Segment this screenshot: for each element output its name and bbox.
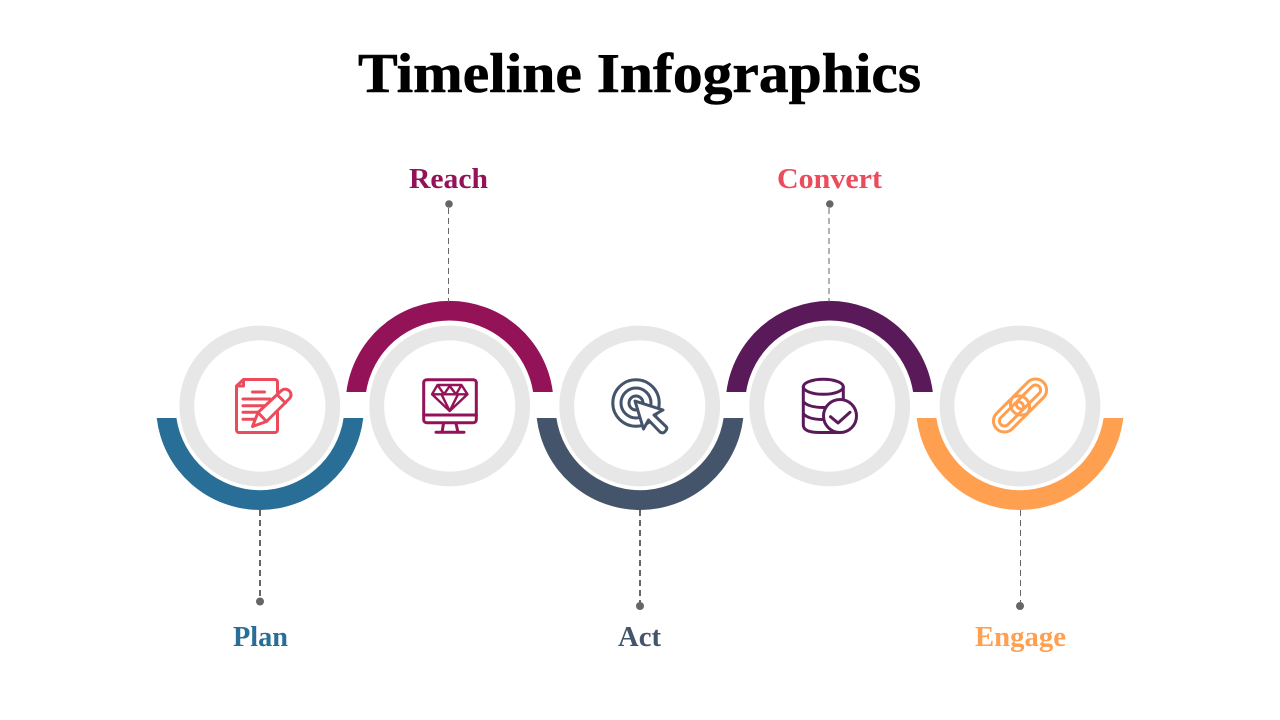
label: Convert: Convert (777, 164, 883, 195)
ring: Engage (947, 333, 1093, 479)
dot: Reach (445, 200, 453, 208)
dashed connector: Engage (1020, 510, 1022, 602)
arc: Act (537, 418, 743, 510)
step 3: Act (537, 333, 743, 653)
label: Plan: Plan (233, 622, 288, 653)
step 1: Plan (157, 333, 363, 653)
step 4: Convert (726, 164, 933, 479)
dot: Act (636, 602, 644, 610)
arc: Plan (157, 418, 363, 510)
icon: document and pencil (236, 380, 291, 432)
icon: database with check (803, 379, 856, 432)
label: Engage: Engage (975, 622, 1066, 653)
label: Reach: Reach (409, 164, 488, 195)
icon: target and cursor (613, 380, 667, 433)
dashed connector: Reach (448, 208, 450, 302)
icon: chain link (989, 374, 1051, 437)
dashed connector: Act (639, 510, 641, 602)
dot: Convert (826, 200, 834, 208)
ring: Act (567, 333, 713, 479)
dot: Plan (256, 598, 264, 606)
ring: Plan (187, 333, 333, 479)
icon: monitor with diamond (424, 380, 476, 432)
title: Timeline Infographics (358, 43, 921, 105)
label: Act: Act (618, 622, 662, 653)
arc: Convert (726, 301, 933, 392)
ring: Reach (377, 333, 523, 479)
step 2: Reach (346, 164, 553, 479)
arc: Engage (917, 418, 1123, 510)
arc: Reach (346, 301, 553, 392)
step 5: Engage (917, 333, 1123, 653)
ring: Convert (757, 333, 903, 479)
dot: Engage (1016, 602, 1024, 610)
dashed connector: Convert (828, 208, 830, 302)
dashed connector: Plan (259, 510, 261, 600)
